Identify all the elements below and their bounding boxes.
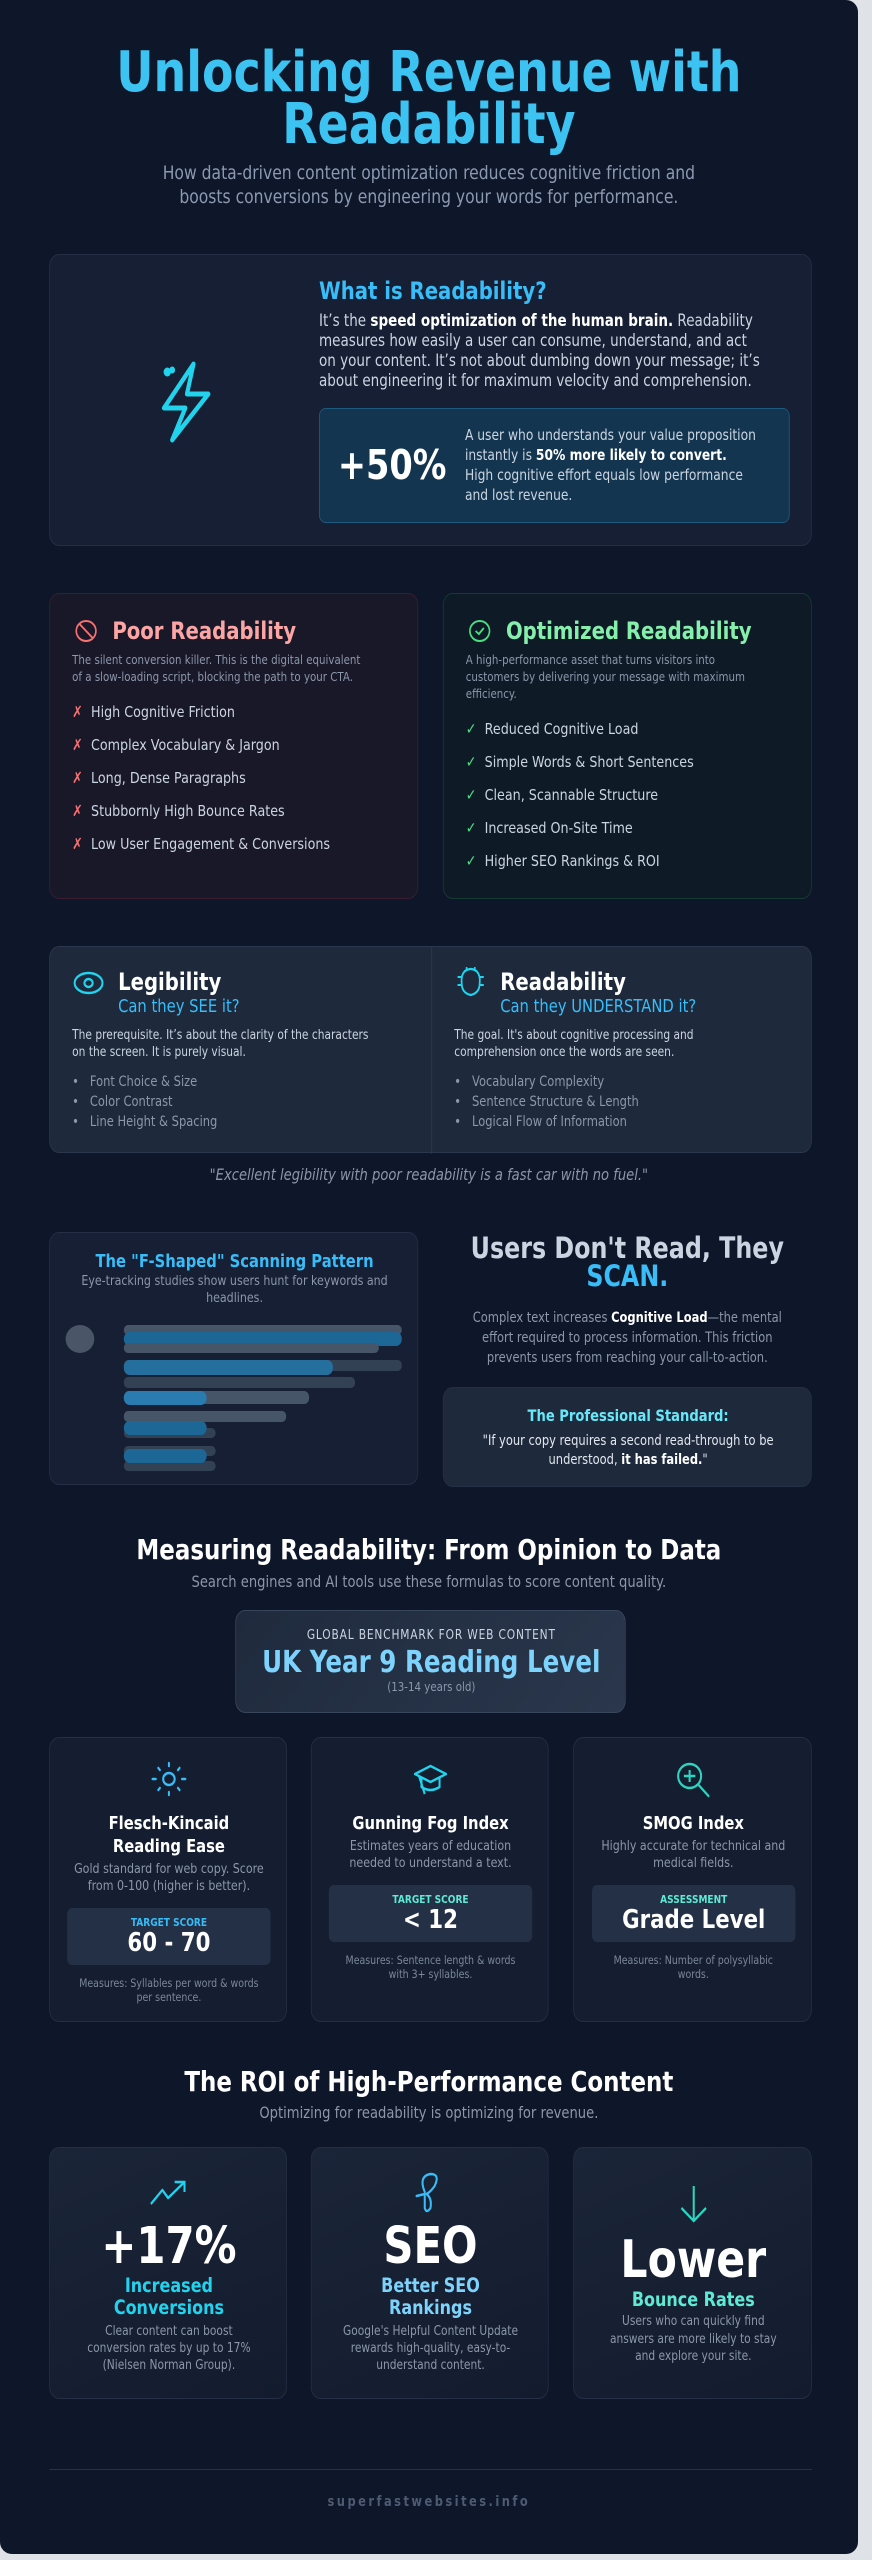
title: Gunning Fog Index xyxy=(352,1813,509,1834)
stat callout xyxy=(319,408,790,523)
quote: "Excellent legibility with poor readability is a fast car with no fuel." xyxy=(210,1165,648,1184)
subtitle: How data-driven content optimization reduces cognitive friction and xyxy=(163,162,695,184)
heading: Poor Readability xyxy=(112,617,296,645)
measures: Measures: Sentence length & words xyxy=(346,1953,515,1967)
description: Clear content can boost xyxy=(105,2324,233,2339)
chart: F pattern bars xyxy=(66,1325,402,1471)
subtitle: boosts conversions by engineering your words for performance. xyxy=(179,186,678,208)
stat text: High cognitive effort equals low performance xyxy=(465,466,743,484)
description: efficiency. xyxy=(466,686,517,701)
panel: F-shaped pattern xyxy=(49,1232,418,1485)
title: Readability xyxy=(282,92,576,157)
list: ✓ xyxy=(466,819,476,837)
title xyxy=(109,1813,229,1857)
description xyxy=(466,652,745,701)
list: readability xyxy=(454,1074,639,1130)
list: ✗ xyxy=(72,769,83,787)
panel: gunning fog xyxy=(311,1737,549,2022)
body text xyxy=(319,311,760,390)
icon: no xyxy=(75,620,97,642)
stat: Lower xyxy=(620,2230,766,2290)
list: legibility xyxy=(72,1074,217,1130)
score box: 60 - 70 xyxy=(127,1928,210,1958)
icon: brain xyxy=(458,967,484,996)
callout: professional standard: understood, it has failed." xyxy=(549,1452,708,1468)
title: Reading Ease xyxy=(113,1836,225,1857)
label: Increased xyxy=(125,2274,213,2297)
list: Increased On-Site Time xyxy=(485,819,633,837)
measures: Measures: Syllables per word & words xyxy=(79,1976,259,1990)
heading: readability: Can they UNDERSTAND it? xyxy=(500,996,696,1017)
measures xyxy=(79,1976,259,2004)
heading: What is Readability? xyxy=(319,277,547,305)
description xyxy=(343,2324,518,2373)
body text: It’s the speed optimization of the human brain. Readability xyxy=(319,311,753,330)
description xyxy=(87,2324,251,2373)
subheading: ROI: Optimizing for readability is optimizing for revenue. xyxy=(259,2103,598,2122)
description: medical fields. xyxy=(653,1855,733,1871)
list: ✓ xyxy=(466,786,476,804)
panel: legibility vs readability xyxy=(49,946,812,1153)
callout: benchmark xyxy=(235,1610,626,1713)
text: legibility: The prerequisite. It’s about the clarity of the characters xyxy=(72,1028,368,1043)
text: readability: The goal. It's about cognitive processing and xyxy=(454,1028,694,1043)
measures: per sentence. xyxy=(137,1990,201,2004)
score box: TARGET SCORE xyxy=(392,1893,469,1906)
stat: +17% xyxy=(101,2217,236,2276)
description: needed to understand a text. xyxy=(349,1855,512,1871)
title: SMOG Index xyxy=(643,1813,744,1834)
description: and explore your site. xyxy=(635,2349,752,2364)
text: cognitive load: effort required to process information. This friction xyxy=(482,1330,773,1346)
label xyxy=(114,2274,224,2319)
score box: < 12 xyxy=(403,1905,458,1935)
description: rewards high-quality, easy-to- xyxy=(351,2341,510,2356)
heading: readability xyxy=(500,968,696,1017)
text: cognitive load: prevents users from reaching your call-to-action. xyxy=(487,1350,768,1366)
measures: words. xyxy=(678,1967,709,1981)
callout: professional standard: The Professional Standard: xyxy=(528,1406,729,1425)
description: Estimates years of education xyxy=(350,1838,511,1854)
heading: measuring: Measuring Readability: From Opinion to Data xyxy=(136,1533,721,1566)
description xyxy=(574,2313,813,2366)
icon: arrow down xyxy=(680,2186,707,2223)
list: Complex Vocabulary & Jargon xyxy=(91,736,280,754)
list: Reduced Cognitive Load xyxy=(485,720,638,738)
list: ✓ xyxy=(466,720,476,738)
heading: users scan: Users Don't Read, They xyxy=(471,1231,784,1265)
description: answers are more likely to stay xyxy=(610,2332,777,2346)
description: Users who can quickly find xyxy=(622,2314,765,2329)
panel: SEO xyxy=(311,2147,549,2399)
measures: Measures: Number of polysyllabic xyxy=(614,1953,773,1967)
heading: users scan xyxy=(471,1231,784,1293)
subtitle xyxy=(163,162,695,208)
description xyxy=(74,1861,264,1894)
label: Better SEO xyxy=(381,2274,480,2297)
list: readability: • Sentence Structure & Length xyxy=(454,1094,639,1110)
assessment box: Grade Level xyxy=(622,1905,765,1935)
icon: trending up xyxy=(150,2180,186,2205)
description: Highly accurate for technical and xyxy=(601,1838,785,1854)
subtext: Eye-tracking studies show users hunt for keywords and xyxy=(81,1273,388,1289)
icon: sun xyxy=(152,1762,186,1796)
assessment box xyxy=(592,1885,795,1942)
description xyxy=(601,1838,785,1871)
list: ✗ xyxy=(72,802,83,820)
list: Long, Dense Paragraphs xyxy=(91,769,246,787)
description: The silent conversion killer. This is the digital equivalent xyxy=(72,652,360,667)
list: High Cognitive Friction xyxy=(91,703,235,721)
heading: users scan: SCAN. xyxy=(586,1259,668,1293)
assessment box: ASSESSMENT xyxy=(660,1893,727,1906)
icon: squiggle xyxy=(416,2172,438,2212)
callout: benchmark: GLOBAL BENCHMARK FOR WEB CONTENT xyxy=(307,1628,556,1643)
description xyxy=(72,652,360,684)
icon: eye xyxy=(74,972,104,994)
heading: The "F-Shaped" Scanning Pattern xyxy=(95,1251,374,1272)
body text: about engineering it for maximum velocity and comprehension. xyxy=(319,371,752,390)
stat text: A user who understands your value proposition xyxy=(465,426,756,444)
list xyxy=(72,703,330,853)
icon: graduation cap xyxy=(414,1764,448,1794)
title: Flesch-Kincaid xyxy=(109,1813,229,1834)
label xyxy=(381,2274,480,2319)
measures: with 3+ syllables. xyxy=(389,1967,472,1981)
heading: legibility: Legibility xyxy=(118,968,221,996)
body text: measures how easily a user can consume, understand, and act xyxy=(319,331,747,350)
list: Clean, Scannable Structure xyxy=(485,786,658,804)
text: legibility: on the screen. It is purely visual. xyxy=(72,1045,246,1060)
description xyxy=(349,1838,512,1871)
list: ✗ xyxy=(72,736,83,754)
list: readability: • Logical Flow of Information xyxy=(454,1114,627,1130)
description: customers by delivering your message with maximum xyxy=(466,669,745,684)
text: cognitive load xyxy=(473,1310,782,1366)
heading: legibility: Can they SEE it? xyxy=(118,996,240,1017)
list: legibility: • Color Contrast xyxy=(72,1094,173,1110)
description: understand content. xyxy=(376,2358,485,2373)
callout: benchmark: UK Year 9 Reading Level xyxy=(262,1645,600,1680)
list: legibility: • Font Choice & Size xyxy=(72,1074,197,1090)
description: (Nielsen Norman Group). xyxy=(103,2358,235,2373)
stat text xyxy=(465,426,756,504)
score box xyxy=(67,1908,271,1965)
description: conversion rates by up to 17% xyxy=(87,2341,251,2356)
icon: magnifier plus xyxy=(677,1762,710,1798)
list: ✗ xyxy=(72,835,83,853)
title xyxy=(116,40,741,157)
measures xyxy=(346,1953,515,1981)
subtext: headlines. xyxy=(206,1290,263,1306)
label: Rankings xyxy=(389,2296,472,2319)
list: Stubbornly High Bounce Rates xyxy=(91,802,285,820)
icon: lightning xyxy=(162,362,210,442)
score box: TARGET SCORE xyxy=(131,1916,207,1929)
list: legibility: • Line Height & Spacing xyxy=(72,1114,217,1130)
description: of a slow-loading script, blocking the path to your CTA. xyxy=(72,669,353,684)
callout: benchmark: (13-14 years old) xyxy=(387,1679,475,1694)
heading: legibility xyxy=(118,968,240,1017)
description: Google's Helpful Content Update xyxy=(343,2324,518,2339)
description: from 0-100 (higher is better). xyxy=(88,1878,250,1894)
heading: ROI: The ROI of High-Performance Content xyxy=(184,2065,673,2098)
panel: smog xyxy=(573,1737,812,2022)
title: Unlocking Revenue with xyxy=(116,40,741,105)
subheading: Search engines and AI tools use these formulas to score content quality. xyxy=(192,1572,666,1591)
list xyxy=(466,720,694,870)
panel: bounce rates xyxy=(573,2147,812,2399)
list: ✓ xyxy=(466,753,476,771)
label: Conversions xyxy=(114,2296,224,2319)
stat text: instantly is 50% more likely to convert. xyxy=(465,446,727,464)
list: readability: • Vocabulary Complexity xyxy=(454,1074,604,1090)
heading: readability: Readability xyxy=(500,968,626,996)
stat: SEO xyxy=(383,2217,478,2276)
panel: poor readability xyxy=(49,593,418,899)
score box xyxy=(329,1885,532,1942)
callout: professional standard: "If your copy requires a second read-through to be xyxy=(483,1433,774,1449)
callout: professional standard xyxy=(443,1387,812,1487)
icon: check circle xyxy=(469,620,490,642)
list: Simple Words & Short Sentences xyxy=(485,753,694,771)
stat text: and lost revenue. xyxy=(465,486,572,504)
text: legibility xyxy=(72,1028,368,1060)
list: ✗ xyxy=(72,703,83,721)
body text: on your content. It’s not about dumbing down your message; it’s xyxy=(319,351,760,370)
measures xyxy=(614,1953,773,1981)
panel: conversions xyxy=(49,2147,287,2399)
text: readability: comprehension once the words are seen. xyxy=(454,1045,674,1060)
panel: optimized readability xyxy=(443,593,812,899)
description: A high-performance asset that turns visitors into xyxy=(466,652,715,667)
description: Gold standard for web copy. Score xyxy=(74,1861,264,1877)
stat number: +50% xyxy=(338,441,446,489)
text: readability xyxy=(454,1028,694,1060)
subtext xyxy=(81,1273,388,1306)
heading: Optimized Readability xyxy=(506,617,752,645)
footer: superfastwebsites.info xyxy=(328,2494,530,2510)
panel: what is readability xyxy=(49,254,812,546)
list: ✓ xyxy=(466,852,476,870)
list: Higher SEO Rankings & ROI xyxy=(485,852,660,870)
panel: flesch-kincaid xyxy=(49,1737,287,2022)
text: cognitive load: Complex text increases Cognitive Load—the mental xyxy=(473,1310,782,1326)
list: Low User Engagement & Conversions xyxy=(91,835,330,853)
label: Bounce Rates xyxy=(632,2288,755,2311)
